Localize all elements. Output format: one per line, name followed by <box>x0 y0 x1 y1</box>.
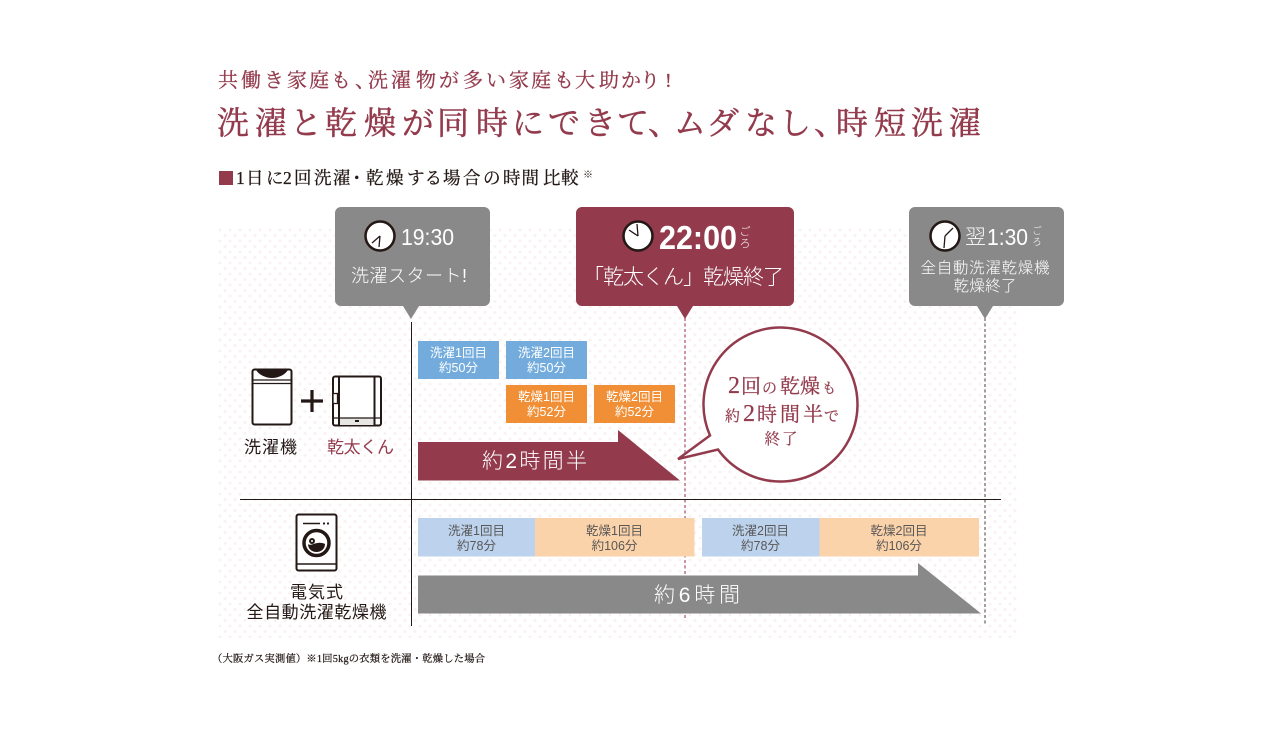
speech bubble: 回 <box>741 376 761 398</box>
arrow: about 6 hours: 約6時間 <box>654 584 740 607</box>
bar: wash 2 (50 min) <box>506 341 587 379</box>
bar: dry 2 (106 min): 約106分 <box>876 538 922 553</box>
bar: dry 1 (106 min): 乾燥1回目 <box>586 524 643 538</box>
icon: clock 19:30 <box>366 222 394 250</box>
callout: next day 1:30 finish: ご <box>1032 225 1042 237</box>
bar: wash 2 (78 min): 約78分 <box>741 538 780 553</box>
timeline guide lines <box>240 318 1001 626</box>
icon: electric washer dryer <box>296 514 336 570</box>
speech bubble: 間 <box>780 404 800 426</box>
icon: clock 1:30 <box>930 222 960 250</box>
bar: dry 1 (52 min) <box>506 385 587 423</box>
speech bubble: の <box>762 381 777 397</box>
callout: 22:00 finish: 22:00 <box>659 219 737 256</box>
arrow: about 6 hours <box>418 563 981 614</box>
callout: next day 1:30 finish: 全自動洗濯乾燥機 <box>920 259 1050 277</box>
bar: wash 2 (50 min): 洗濯2回目 <box>518 346 575 360</box>
title: 洗濯と乾燥が同時にできて、ムダなし、時短洗濯 <box>217 105 981 141</box>
bar: dry 2 (52 min) <box>594 385 675 423</box>
icon: Kanta-kun dryer <box>333 376 381 426</box>
subtitle: 共働き家庭も、洗濯物が多い家庭も大助かり! <box>218 69 672 92</box>
label: electric washer dryer: 全自動洗濯乾燥機 <box>246 603 386 622</box>
bar: wash 1 (78 min): 約78分 <box>457 538 496 553</box>
label: electric washer dryer: 電気式 <box>290 583 343 602</box>
section heading: 1日に2回洗濯・乾燥する場合の時間比較 <box>236 168 579 188</box>
callout: 22:00 finish: 「乾太くん」乾燥終了 <box>583 266 784 289</box>
speech bubble: 2 <box>728 373 740 399</box>
callout: next day 1:30 finish <box>909 207 1064 319</box>
section heading: ※ <box>583 170 593 181</box>
callout: 22:00 finish: ろ <box>740 238 750 250</box>
bar: wash 2 (78 min): 洗濯2回目 <box>732 524 789 538</box>
bar: dry 1 (52 min): 乾燥1回目 <box>518 390 575 404</box>
speech bubble: 燥 <box>800 375 820 398</box>
callout: 22:00 finish: ご <box>740 225 750 238</box>
dotted chart background <box>218 226 1018 638</box>
label: electric washer dryer <box>246 583 386 622</box>
bar: wash 1 (78 min) <box>418 518 535 556</box>
speech bubble: で <box>824 409 839 425</box>
speech bubble: 2 <box>743 401 755 427</box>
bar: wash 2 (50 min): 約50分 <box>527 360 566 375</box>
icon: plus <box>301 390 323 412</box>
bar: dry 1 (52 min): 約52分 <box>527 404 566 419</box>
bar: dry 2 (106 min) <box>820 518 979 556</box>
bar: dry 1 (106 min) <box>535 518 694 556</box>
footnote: （大阪ガス実測値）※1回5kgの衣類を洗濯・乾燥した場合 <box>212 652 485 665</box>
callout: 19:30 start: 19:30 <box>401 224 454 250</box>
bar: wash 1 (50 min): 洗濯1回目 <box>430 346 487 360</box>
speech bubble: 乾 <box>780 375 800 398</box>
label: Kanta-kun: 乾太くん <box>327 438 394 457</box>
speech bubble <box>678 328 857 482</box>
bar: wash 1 (78 min): 洗濯1回目 <box>448 524 505 538</box>
bar: wash 2 (78 min) <box>702 518 820 556</box>
speech bubble: 時 <box>757 403 777 426</box>
callout: 22:00 finish <box>576 207 794 319</box>
speech bubble: 約 <box>725 408 740 425</box>
callout: 19:30 start <box>335 207 490 319</box>
icon: clock 22:00 <box>624 222 652 250</box>
bar: dry 1 (106 min): 約106分 <box>592 538 638 553</box>
callout: next day 1:30 finish: ろ <box>1032 237 1042 248</box>
bar: dry 2 (52 min): 約52分 <box>615 404 654 419</box>
bar: wash 1 (50 min) <box>418 341 499 379</box>
callout: 19:30 start: 洗濯スタート! <box>351 266 467 286</box>
label: washing machine: 洗濯機 <box>244 438 297 457</box>
speech bubble: 終了 <box>764 430 798 448</box>
speech bubble: も <box>822 382 836 397</box>
arrow: about 2.5 hours <box>418 430 680 480</box>
speech bubble: 半 <box>803 403 823 426</box>
bar: dry 2 (52 min): 乾燥2回目 <box>606 390 663 404</box>
bar: dry 2 (106 min): 乾燥2回目 <box>871 524 927 538</box>
icon: washing machine <box>252 370 292 424</box>
callout: next day 1:30 finish: 翌 <box>965 226 986 249</box>
arrow: about 2.5 hours: 約2時間半 <box>482 450 587 473</box>
callout: next day 1:30 finish: 乾燥終了 <box>954 277 1016 295</box>
bar: wash 1 (50 min): 約50分 <box>439 360 478 375</box>
callout: next day 1:30 finish: 1:30 <box>987 224 1028 250</box>
